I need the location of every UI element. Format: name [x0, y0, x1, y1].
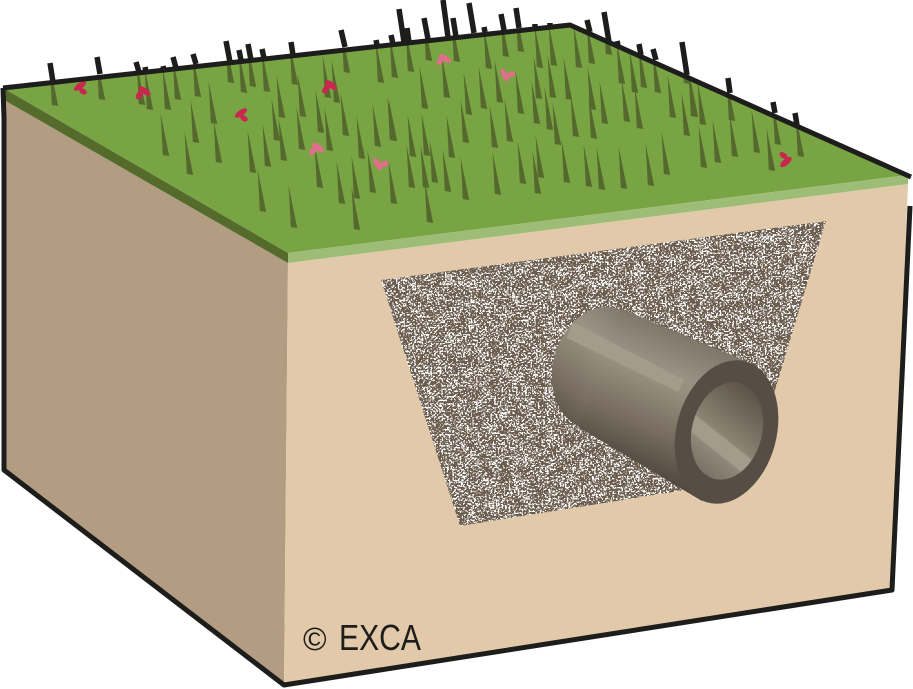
copyright text: EXCA: [339, 617, 421, 658]
panel: right soil face: [284, 184, 908, 685]
pipe highlight band: [567, 322, 684, 392]
panel: top grass surface: [3, 25, 908, 253]
flower: [435, 52, 453, 66]
pipe opening: [680, 374, 774, 488]
flower: [134, 85, 152, 101]
flower: [234, 107, 249, 123]
gravel backfill trapezoid: [375, 215, 835, 531]
flower: [499, 67, 516, 83]
icon: pipe: [539, 296, 794, 515]
copyright text: ©: [303, 621, 327, 657]
copyright text: [303, 617, 421, 658]
panel: left soil face: [4, 100, 288, 685]
red and pink flowers: [73, 52, 793, 172]
grass blades: [50, 9, 804, 230]
pipe front ring: [659, 349, 794, 515]
light turf edge, right: [288, 175, 908, 263]
black grass stems above the back edges: [50, 0, 797, 125]
pipe body: [578, 309, 750, 501]
flower: [320, 78, 339, 95]
pipe back end: [539, 296, 661, 440]
flower: [778, 151, 793, 169]
dark turf edge, left: [3, 88, 288, 263]
flower: [307, 141, 326, 157]
flower: [371, 156, 390, 172]
flower: [73, 80, 88, 96]
